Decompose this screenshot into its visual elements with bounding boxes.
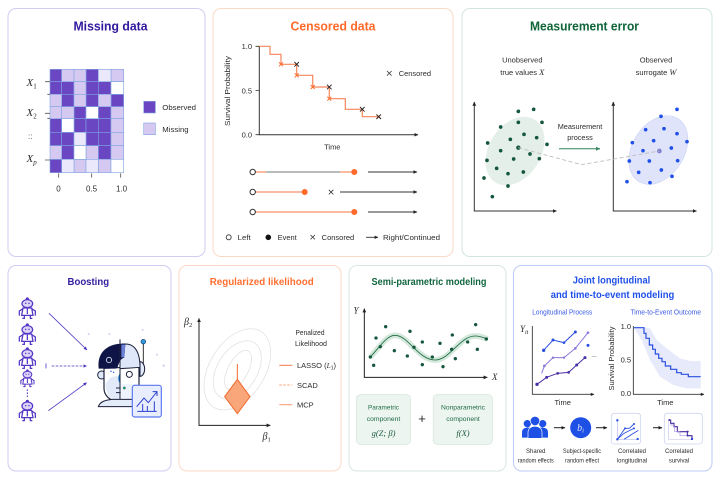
label: observed: surrogate W <box>636 67 677 77</box>
penalty legend: LASSO (L <box>297 361 331 370</box>
x axis labels: 0.5 <box>86 184 98 194</box>
label: observed <box>636 56 677 77</box>
heading: measurement error: Measurement error <box>530 18 639 34</box>
beta labels: 1 <box>267 436 271 444</box>
axis labels: X <box>491 372 498 382</box>
beta labels: 2 <box>189 322 192 329</box>
panel: measurement error <box>462 8 712 256</box>
axis labels <box>354 306 498 382</box>
censored key: Censored <box>399 69 431 78</box>
panel: joint modeling: Y <box>520 324 525 334</box>
box: parametric component: component <box>367 416 400 423</box>
arrow: measurement process: Measurement <box>558 122 602 131</box>
x axis labels <box>56 184 128 194</box>
timeline legend <box>226 233 440 242</box>
measurement process link <box>518 148 659 165</box>
heading: joint modeling <box>551 274 674 301</box>
box: nonparametric component: component <box>446 416 480 423</box>
heading: semi-parametric modeling: Semi-parametric modeling <box>372 276 486 288</box>
label: observed: Observed <box>640 56 672 64</box>
panel: joint modeling: Time <box>555 398 571 407</box>
penalty legend: MCP <box>297 400 314 410</box>
captions: Correlated <box>618 449 646 455</box>
box: nonparametric component <box>433 395 492 444</box>
panel: joint modeling: Survival Probability <box>609 326 616 390</box>
panel: censored data <box>213 8 453 256</box>
panel: joint modeling: 0.5 <box>621 356 631 364</box>
box: nonparametric component: Nonparametric <box>441 404 486 412</box>
node: random effect b_i: i <box>582 428 584 434</box>
row labels: :: <box>28 132 32 141</box>
beta labels: β <box>262 432 267 442</box>
panel: regularized likelihood <box>179 266 341 471</box>
arrow <box>596 427 607 429</box>
row labels: 2 <box>33 112 37 120</box>
arrow <box>653 427 662 429</box>
heading: joint modeling: Joint longitudinal <box>573 274 650 286</box>
box: parametric component <box>356 395 410 444</box>
label: unobserved: Unobserved <box>502 56 543 64</box>
box: parametric component: g(Z; β) <box>372 428 396 438</box>
panel: joint modeling: 0.0 <box>621 389 631 398</box>
row labels: X <box>26 77 33 89</box>
captions: Shared <box>526 449 545 455</box>
beta labels: β <box>184 317 189 328</box>
captions: longitudinal <box>617 458 647 464</box>
node: random effect b_i <box>570 417 591 438</box>
icon: AI head with chart <box>88 329 165 417</box>
mini chart: correlated longitudinal <box>611 413 641 444</box>
captions: random effect <box>565 458 599 464</box>
heatmap <box>45 69 124 178</box>
row labels: p <box>32 158 37 166</box>
penalty legend <box>279 330 337 410</box>
penalty legend: 1 <box>331 366 334 372</box>
survival step chart: Time <box>324 142 340 152</box>
plus sign: + <box>418 411 426 426</box>
captions: random effects <box>518 458 554 464</box>
panel: boosting <box>8 266 171 471</box>
label: unobserved: true values X <box>500 67 545 77</box>
mini chart: correlated survival <box>664 413 702 444</box>
heading: censored data: Censored data <box>290 18 376 34</box>
survival step chart: 1.0 <box>242 42 252 51</box>
penalty legend: ) <box>334 361 337 370</box>
row labels: 1 <box>33 82 37 90</box>
heading: boosting: Boosting <box>68 277 109 288</box>
survival step chart: Survival Probability <box>225 55 232 126</box>
captions <box>518 449 693 464</box>
heading: joint modeling: and time-to-event modeling <box>551 289 674 301</box>
timeline legend: Event <box>278 233 297 242</box>
panel: joint modeling: 1.0 <box>621 322 631 331</box>
row labels: X <box>26 153 33 165</box>
scatter: surrogate <box>613 102 700 211</box>
arrows to ensemble <box>46 313 87 411</box>
penalty legend: Likelihood <box>295 341 327 348</box>
label: unobserved <box>500 56 545 77</box>
x axis labels: 0 <box>56 184 61 194</box>
captions: Subject-specific <box>563 449 601 455</box>
row labels <box>26 77 37 166</box>
axis labels: Y <box>354 306 360 316</box>
scatter: true values <box>473 102 557 211</box>
timelines <box>250 169 417 215</box>
subheading: time-to-event: Time-to-Event Outcome <box>630 310 701 316</box>
arrow: measurement process: process <box>567 133 593 142</box>
timeline legend: Consored <box>322 233 354 242</box>
penalty legend: SCAD <box>297 381 318 390</box>
longitudinal chart <box>532 326 597 394</box>
contour plot <box>190 317 284 425</box>
timeline legend: Left <box>238 233 251 242</box>
legend <box>144 101 196 135</box>
legend: Observed <box>162 103 196 112</box>
x axis labels: 1.0 <box>116 184 128 194</box>
panel: joint modeling <box>514 266 712 471</box>
row labels: X <box>26 107 33 119</box>
box: parametric component: Parametric <box>368 404 400 412</box>
arrow <box>554 427 565 429</box>
heading: regularized likelihood: Regularized likelihood <box>210 276 314 288</box>
legend: Missing <box>162 125 189 134</box>
node: random effect b_i: b <box>577 423 582 434</box>
panel: semi-parametric modeling <box>349 266 506 471</box>
beta labels <box>183 317 271 444</box>
captions: Correlated <box>665 449 693 455</box>
box: nonparametric component: f(X) <box>456 428 470 438</box>
survival step chart <box>225 42 418 152</box>
penalty legend: Penalized <box>296 330 325 337</box>
subheading: longitudinal process: Longitudinal Process <box>532 310 593 316</box>
timeline legend: Right/Continued <box>383 233 440 242</box>
smooth curve scatter <box>364 309 488 377</box>
heading: missing data: Missing data <box>74 18 148 34</box>
icon: people <box>522 416 548 438</box>
arrow: measurement process <box>558 122 602 149</box>
survival step chart: 0.0 <box>242 130 252 140</box>
panel: joint modeling: it <box>525 330 529 336</box>
weak learner robots <box>19 298 35 421</box>
captions: survival <box>669 458 689 464</box>
panel: joint modeling: Time <box>657 398 673 407</box>
survival curve chart <box>633 326 704 394</box>
survival step chart: 0.5 <box>242 86 252 96</box>
panel: missing data <box>8 8 205 256</box>
